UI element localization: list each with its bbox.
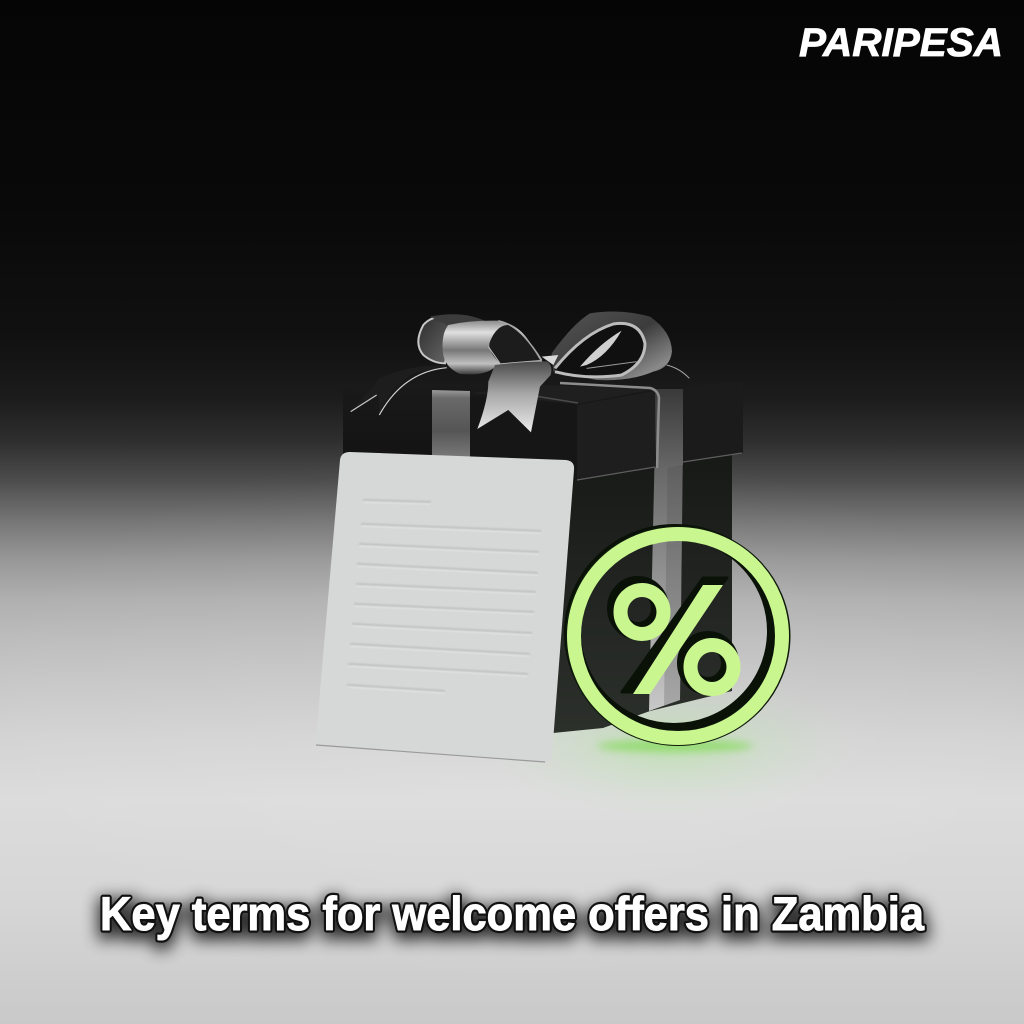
inner dark of left loop: [489, 325, 540, 363]
box lid: [343, 381, 743, 480]
card text lines: [348, 500, 540, 693]
left dark top: [430, 314, 487, 325]
ring face: [574, 534, 782, 738]
vertical ribbon right: [560, 383, 683, 470]
percent badge: [566, 527, 790, 745]
hanging ribbon tail: [477, 361, 551, 432]
gift box: [343, 311, 743, 733]
title text: Key terms for welcome offers in Zambia: [100, 887, 925, 940]
document card: [316, 452, 574, 762]
title outline: Key terms for welcome offers in Zambia: [100, 887, 925, 940]
logo: PARIPESA: [799, 21, 1003, 65]
left tail: [351, 365, 453, 415]
title shadow: Key terms for welcome offers in Zambia: [100, 892, 925, 945]
left bow cylinder: [443, 321, 543, 374]
percent extrusion: [616, 578, 730, 692]
box body: [553, 440, 732, 733]
green floor glow: [470, 660, 870, 830]
right bow loop: [542, 311, 689, 380]
vertical ribbon left: [432, 390, 470, 458]
bow: [351, 311, 689, 432]
percent face: [620, 585, 734, 694]
title: [100, 887, 925, 945]
left outer loop: [418, 317, 453, 363]
ring extrusion: [566, 527, 790, 745]
